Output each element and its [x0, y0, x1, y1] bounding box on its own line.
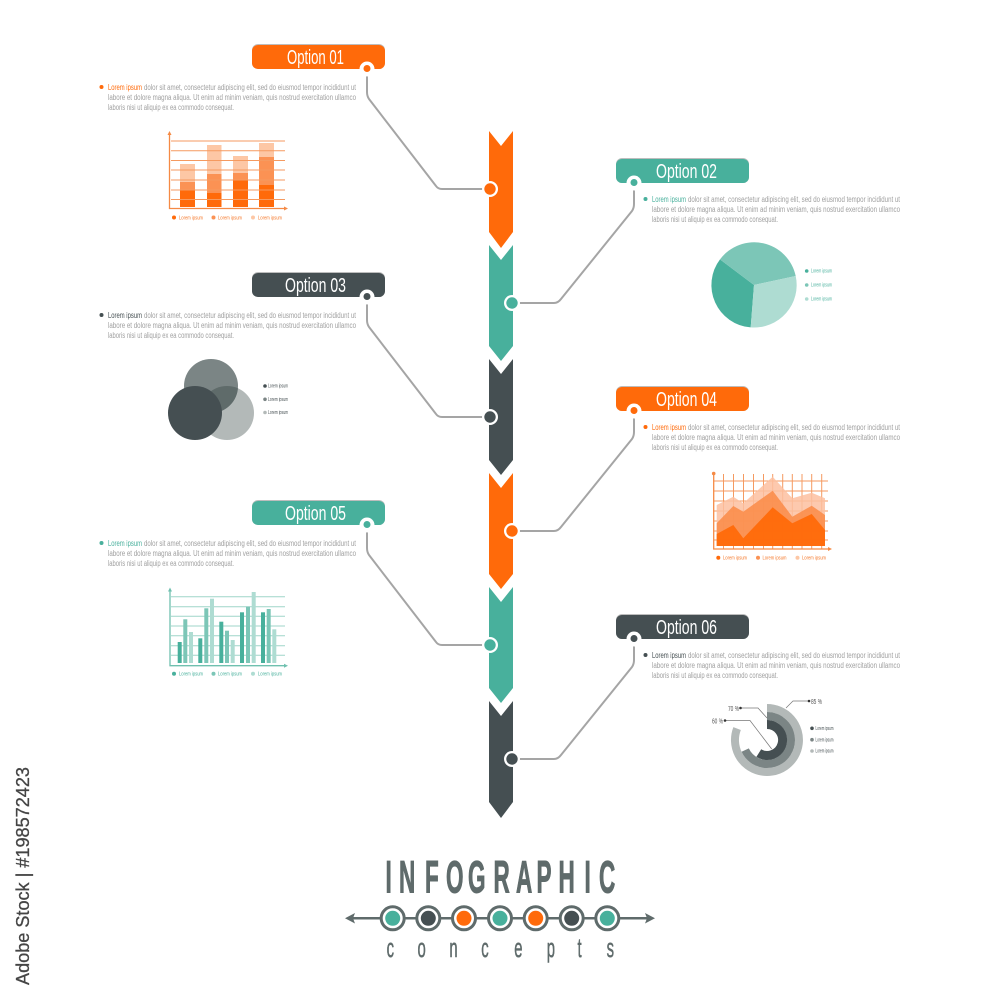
chart: grouped bars: Lorem ipsum [179, 672, 203, 678]
chart: grouped bars: Lorem ipsum [258, 672, 282, 678]
text block: option 03: laboris nisi ut aliquip ex ea commodo consequat. [108, 331, 234, 340]
text block: option 04: labore et dolore magna aliqua. Ut enim ad minim veniam, quis nostrud exercitation ullamco [652, 433, 900, 442]
text block: option 01: dolor sit amet, consectetur adipiscing elit, sed do eiusmod tempor incididunt ut [144, 83, 357, 92]
title decoration: bead timeline with arrows [345, 907, 655, 930]
timeline node 2 [504, 295, 520, 311]
text block: option 01: labore et dolore magna aliqua. Ut enim ad minim veniam, quis nostrud exercitation ullamco [108, 93, 356, 102]
text block: option 03: dolor sit amet, consectetur adipiscing elit, sed do eiusmod tempor incididunt ut [144, 311, 357, 320]
panel: option 04 [616, 386, 901, 562]
text block: option 05: labore et dolore magna aliqua. Ut enim ad minim veniam, quis nostrud exercitation ullamco [108, 549, 356, 558]
text block: option 05 [100, 539, 357, 568]
tag: option 03: Option 03 [285, 275, 346, 297]
timeline spine: six chevron segments [489, 131, 513, 818]
timeline node 3 [482, 409, 498, 425]
tag: option 05 [252, 500, 385, 532]
timeline node 5 [482, 637, 498, 653]
panel: option 02 [616, 158, 901, 328]
chart: stacked bars [168, 131, 288, 222]
text block: option 05: Lorem ipsum [108, 539, 142, 548]
tag: option 02 [616, 158, 749, 190]
text block: option 04: Lorem ipsum [652, 423, 686, 432]
tag: option 03 [252, 272, 385, 304]
chart: radial donut: Lorem ipsum [816, 737, 834, 743]
chart: stacked bars: Lorem ipsum [258, 216, 282, 222]
chart: radial donut: 70 % [728, 706, 739, 713]
timeline node 1 [482, 181, 498, 197]
tag: option 01 [252, 44, 385, 76]
panel: option 06 [616, 614, 901, 772]
chart: pie: Lorem ipsum [811, 269, 832, 275]
chart: pie [711, 242, 832, 328]
text block: option 04: laboris nisi ut aliquip ex ea commodo consequat. [652, 443, 778, 452]
chart: area [712, 472, 832, 562]
tag: option 02: Option 02 [656, 161, 717, 183]
timeline node 4 [504, 523, 520, 539]
connector lines [367, 68, 634, 759]
text block: option 05: laboris nisi ut aliquip ex ea commodo consequat. [108, 559, 234, 568]
tag: option 04 [616, 386, 749, 418]
text block: option 03 [100, 311, 357, 340]
chart: radial donut: Lorem ipsum [816, 726, 834, 732]
chart: pie: Lorem ipsum [811, 297, 832, 303]
chart: area: Lorem ipsum [802, 556, 826, 562]
tag: option 04: Option 04 [656, 389, 717, 411]
panel: option 03 [100, 272, 385, 440]
text block: option 02 [644, 195, 901, 224]
chart: venn circles: Lorem ipsum [268, 410, 288, 416]
text block: option 06: laboris nisi ut aliquip ex ea commodo consequat. [652, 671, 778, 680]
chart: stacked bars: Lorem ipsum [179, 216, 203, 222]
text block: option 03: Lorem ipsum [108, 311, 142, 320]
tag: option 06 [616, 614, 749, 646]
chart: area: Lorem ipsum [723, 556, 747, 562]
text block: option 02: Lorem ipsum [652, 195, 686, 204]
panel: option 01 [100, 44, 385, 222]
text block: option 06 [644, 651, 901, 680]
text block: option 02: labore et dolore magna aliqua. Ut enim ad minim veniam, quis nostrud exercitation ullamco [652, 205, 900, 214]
text block: option 04: dolor sit amet, consectetur adipiscing elit, sed do eiusmod tempor incididunt ut [688, 423, 901, 432]
chart: grouped bars [168, 588, 288, 678]
chart: radial donut [712, 699, 834, 772]
chart: area: Lorem ipsum [762, 556, 786, 562]
text block: option 01: Lorem ipsum [108, 83, 142, 92]
text block: option 03: labore et dolore magna aliqua. Ut enim ad minim veniam, quis nostrud exercitation ullamco [108, 321, 356, 330]
text block: option 04 [644, 423, 901, 452]
tag: option 06: Option 06 [656, 617, 717, 639]
chart: venn circles: Lorem ipsum [268, 384, 288, 390]
tag: option 05: Option 05 [285, 503, 346, 525]
text block: option 01: laboris nisi ut aliquip ex ea commodo consequat. [108, 103, 234, 112]
chart: venn circles: Lorem ipsum [268, 397, 288, 403]
text block: option 02: laboris nisi ut aliquip ex ea commodo consequat. [652, 215, 778, 224]
timeline node 6 [504, 751, 520, 767]
panel: option 05 [100, 500, 385, 678]
chart: venn circles [168, 359, 288, 440]
chart: pie: Lorem ipsum [811, 283, 832, 289]
text block: option 06: Lorem ipsum [652, 651, 686, 660]
title: INFOGRAPHIC: INFOGRAPHIC [386, 852, 615, 903]
text block: option 06: dolor sit amet, consectetur adipiscing elit, sed do eiusmod tempor incididunt ut [688, 651, 901, 660]
chart: radial donut: Lorem ipsum [816, 749, 834, 755]
chart: stacked bars: Lorem ipsum [218, 216, 242, 222]
chart: grouped bars: Lorem ipsum [218, 672, 242, 678]
chart: radial donut: 60 % [712, 718, 723, 726]
text block: option 01 [100, 83, 357, 112]
tag: option 01: Option 01 [287, 47, 344, 69]
subtitle: concepts: concepts [387, 932, 614, 963]
text block: option 05: dolor sit amet, consectetur adipiscing elit, sed do eiusmod tempor incididunt ut [144, 539, 357, 548]
text block: option 02: dolor sit amet, consectetur adipiscing elit, sed do eiusmod tempor incididunt ut [688, 195, 901, 204]
text block: option 06: labore et dolore magna aliqua. Ut enim ad minim veniam, quis nostrud exercitation ullamco [652, 661, 900, 670]
chart: radial donut: 85 % [811, 699, 822, 706]
side credit text: Adobe Stock | #198572423 [13, 767, 33, 985]
